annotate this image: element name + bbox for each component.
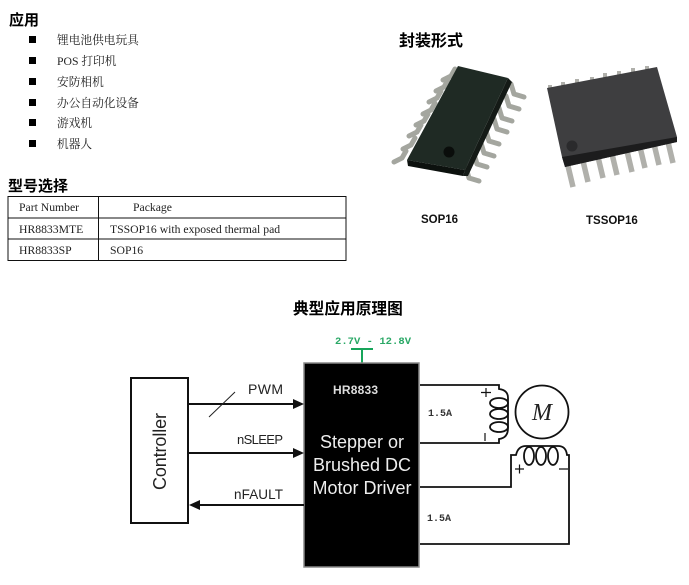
driver block — [304, 363, 419, 567]
driver block: Brushed DC — [313, 455, 411, 475]
current label: winding A: 1.5A — [428, 409, 452, 420]
motor winding B — [420, 446, 569, 544]
label: TSSOP16: TSSOP16 — [586, 215, 638, 227]
table: part numbers: TSSOP16 with exposed thermal pad — [110, 223, 280, 236]
chip photo: TSSOP16 — [547, 66, 677, 187]
applications list: POS 打印机 — [57, 54, 117, 68]
applications list: 办公自动化设备 — [57, 96, 139, 110]
heading: applications: 应用 — [9, 11, 39, 29]
driver block: HR8833 — [333, 383, 378, 397]
chip photo: SOP16 — [394, 66, 524, 181]
table: part numbers — [8, 196, 346, 260]
label: SOP16: SOP16 — [421, 214, 458, 226]
applications list: 锂电池供电玩具 — [57, 33, 140, 47]
arrow: PWM: PWM — [248, 381, 283, 397]
driver block: Stepper or — [320, 432, 404, 452]
controller block: Controller — [150, 413, 170, 490]
arrow: nSLEEP — [188, 432, 304, 458]
controller block — [131, 378, 188, 523]
applications list: 安防相机 — [57, 75, 104, 89]
arrow: nSLEEP: nSLEEP — [237, 432, 283, 447]
heading: package type: 封装形式 — [399, 32, 463, 50]
current label: winding B: 1.5A — [427, 514, 451, 525]
applications list: 机器人 — [57, 137, 92, 151]
table: part numbers: Package — [133, 201, 172, 214]
table: part numbers: SOP16 — [110, 244, 143, 257]
arrow: nFAULT: nFAULT — [234, 487, 283, 502]
heading: model selection: 型号选择 — [8, 177, 68, 195]
arrow: PWM — [188, 381, 304, 417]
applications list: 游戏机 — [57, 116, 92, 130]
applications list — [29, 33, 140, 151]
arrow: nFAULT — [189, 487, 304, 510]
table: part numbers: HR8833SP — [19, 244, 72, 257]
heading: typical application schematic: 典型应用原理图 — [293, 299, 403, 318]
driver block: Motor Driver — [312, 478, 412, 498]
motor symbol: M — [531, 400, 554, 426]
motor winding A — [420, 385, 508, 443]
motor symbol — [516, 386, 568, 438]
table: part numbers: Part Number — [19, 201, 79, 214]
table: part numbers: HR8833MTE — [19, 223, 83, 236]
supply rail symbol — [351, 349, 373, 363]
supply voltage label: 2.7V - 12.8V — [335, 336, 412, 348]
